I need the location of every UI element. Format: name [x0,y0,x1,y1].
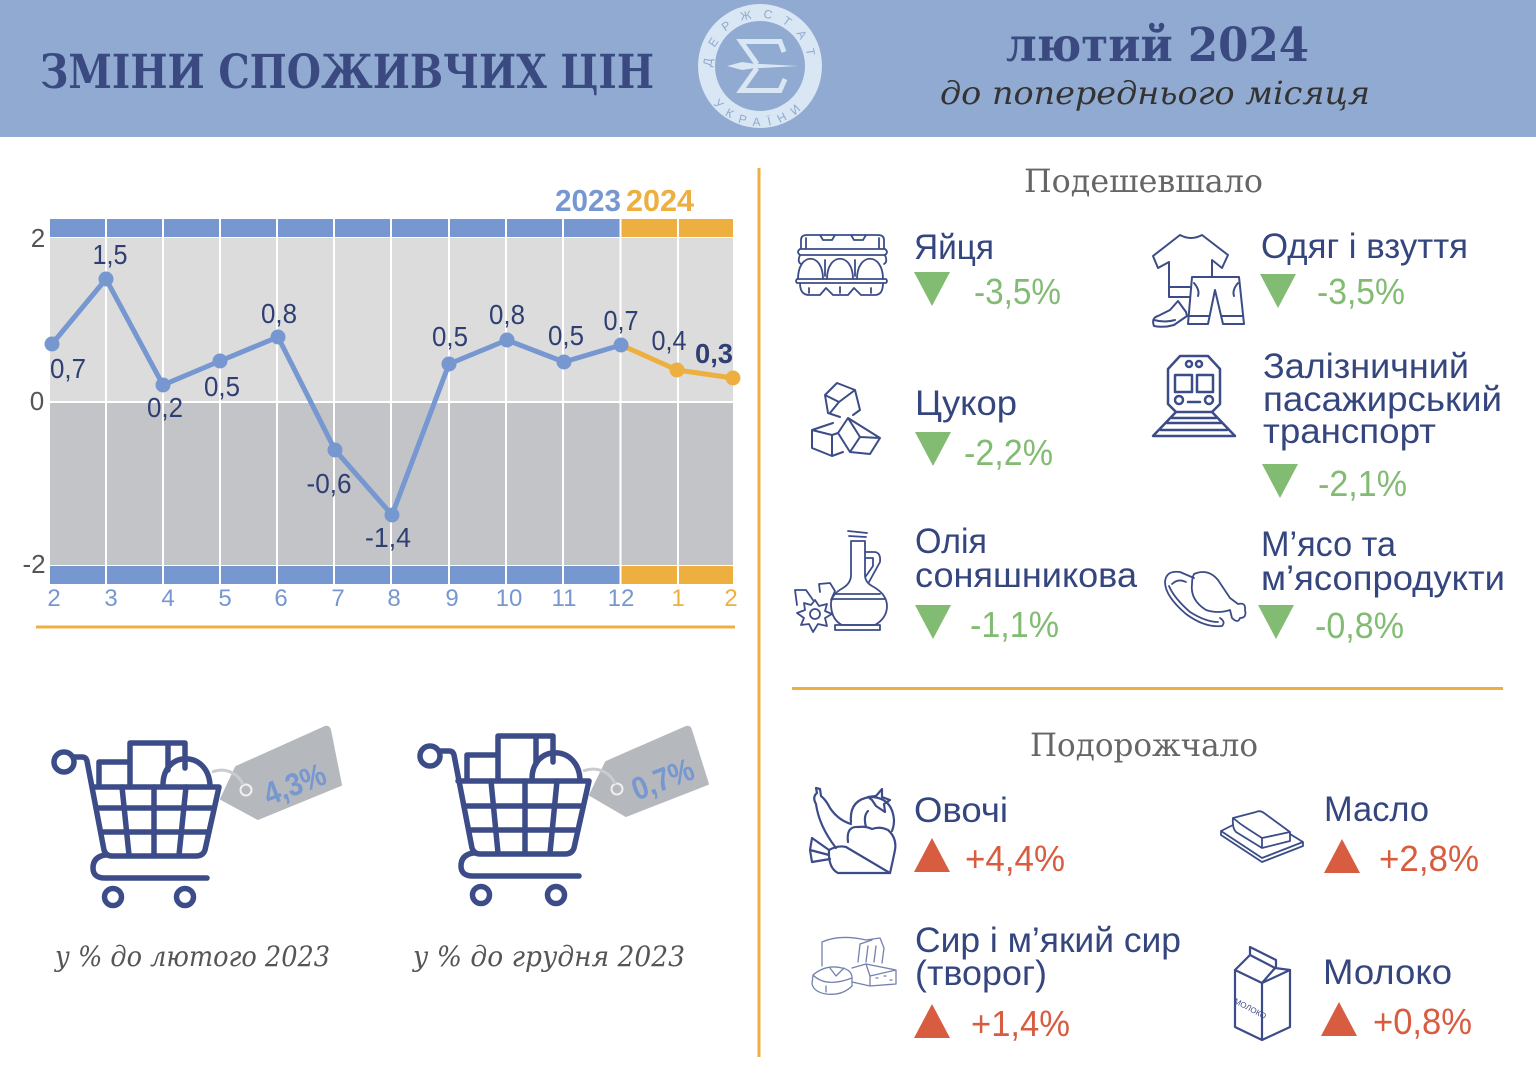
cart icon [420,736,589,904]
value: +0,8% [1373,1001,1472,1042]
label: соняшникова [915,556,1138,595]
value: -3,5% [974,271,1061,312]
label: Яйця [914,228,994,267]
arrow: up [914,1004,950,1038]
label [915,522,1138,595]
value labels: 1,5 [92,239,128,270]
month axis labels: 9 [445,585,459,612]
2023 data line [44,272,621,522]
month axis labels: 4 [161,585,175,612]
label: Овочі [914,791,1008,830]
cart with tag: 4,3% [54,727,341,906]
icon: cheese [812,937,896,994]
cart icon [54,743,219,906]
caption: to February 2023: у % до лютого 2023 [53,940,330,973]
label: Олія [915,522,987,561]
item: eggs [796,228,1061,312]
icon: egg carton [796,235,887,295]
arrow: down [1262,464,1298,498]
arrow: up [914,838,950,872]
month axis labels: 11 [552,585,576,612]
month axis labels: 7 [331,585,345,612]
label: Одяг і взуття [1261,227,1468,266]
label: Молоко [1323,953,1452,992]
month axis labels: 6 [274,585,288,612]
arrow: up [1321,1002,1357,1036]
month axis labels: 10 [496,585,522,612]
value labels: 0,7 [50,353,86,384]
item: clothing and footwear [1153,227,1468,327]
month axis labels: 12 [608,585,634,612]
month axis labels: 5 [218,585,232,612]
label: (творог) [915,954,1047,993]
year labels: 2023 [555,183,621,218]
label [915,921,1181,993]
2024 data line [614,338,740,386]
y axis labels: -2 [22,549,46,579]
label: пасажирський [1263,380,1502,419]
value labels: 0,5 [548,320,584,351]
value labels [50,239,733,553]
value labels: 0,2 [147,392,183,423]
logo: Derzhstat [698,4,822,128]
arrow: down [914,272,950,306]
month axis labels: 2 [47,585,61,612]
icon: meat and drumstick [1165,572,1245,626]
item: milk [1233,947,1472,1042]
arrow: down [915,432,951,466]
y axis labels: 0 [30,386,44,416]
month axis labels: 3 [104,585,118,612]
value labels: 0,4 [652,325,686,356]
month axis labels: 2 [724,585,738,612]
icon: vegetables [810,788,895,873]
value: +2,8% [1379,838,1479,879]
value labels: 0,5 [204,371,240,402]
month axis labels: 8 [387,585,401,612]
item: meat [1165,525,1505,646]
value labels: 0,8 [261,298,297,329]
line chart: monthly price change [22,183,740,612]
value labels: -1,4 [365,522,411,553]
value: +4,4% [965,838,1065,879]
icon: oil bottle with sunflower [795,531,887,632]
label: транспорт [1263,412,1436,451]
icon: milk carton: МОЛОКО [1233,997,1268,1021]
label: Залізничний [1263,347,1469,386]
logo: Derzhstat: ДЕРЖСТАТ [703,10,815,68]
cart with tag: 0,7% [420,727,708,904]
label: Цукор [915,384,1017,423]
price tag: 4,3% [258,756,331,812]
item: railway transport [1153,347,1502,504]
value: -1,1% [970,604,1059,645]
label: Масло [1324,790,1429,829]
value labels: 0,3 [695,338,733,369]
arrow: down [1260,274,1296,308]
label [1261,525,1505,598]
label: м’ясопродукти [1261,559,1505,598]
month axis labels [47,585,738,612]
heading: cheaper: Подешевшало [1024,162,1263,200]
item: cheese [812,921,1181,1044]
icon: milk carton [1233,947,1290,1040]
label: Сир і м’який сир [915,921,1181,960]
label [1263,347,1502,451]
item: sugar [812,383,1053,473]
value labels: 0,8 [489,299,525,330]
price tag [212,727,341,819]
year labels: 2024 [626,183,695,218]
arrow: down [1258,605,1294,639]
arrow: up [1324,839,1360,873]
year labels [555,183,695,218]
value labels: 0,7 [604,305,638,336]
value labels: 0,5 [432,321,468,352]
label: М’ясо та [1261,525,1397,564]
icon: clothes [1153,235,1244,327]
heading: more expensive: Подорожчало [1030,726,1258,764]
value: +1,4% [971,1003,1070,1044]
icon: sugar cubes [812,383,880,456]
price tag: 0,7% [626,751,699,807]
value labels: -0,6 [306,468,352,499]
icon: butter dish [1221,811,1303,862]
period subheading: до попереднього місяця [940,74,1370,112]
caption: to December 2023: у % до грудня 2023 [411,940,685,973]
value: -0,8% [1315,605,1404,646]
value: -2,1% [1318,463,1407,504]
icon: train [1153,356,1235,436]
y axis labels: 2 [31,223,45,253]
value: -3,5% [1317,271,1405,312]
title: ЗМІНИ СПОЖИВЧИХ ЦІН [40,45,654,100]
logo: Derzhstat: УКРАЇНИ [714,98,800,126]
y axis labels [22,223,46,579]
item: butter [1221,790,1479,879]
month axis labels: 1 [671,585,685,612]
period heading: лютий 2024 [1006,18,1309,73]
value: -2,2% [964,432,1053,473]
price tag [583,727,708,816]
arrow: down [915,605,951,639]
item: sunflower oil [795,522,1138,645]
item: vegetables [810,788,1065,879]
header band [0,0,1536,137]
